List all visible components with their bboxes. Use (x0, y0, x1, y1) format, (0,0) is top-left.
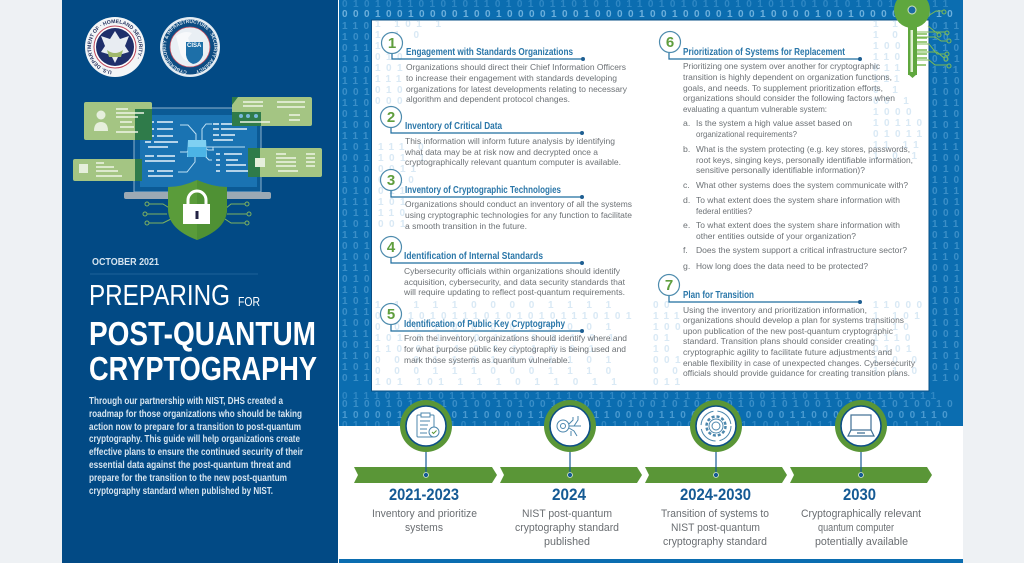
faint binary watermark: 101 (378, 197, 411, 208)
step 6: prioritization of systems for replacement: Prioritizing one system over another for cryptographic (683, 61, 881, 71)
checklist of prioritization factors: What is the system protecting (e.g. key stores, passwords, (696, 144, 910, 154)
checklist of prioritization factors: Is the system a high value asset based on (696, 118, 852, 128)
intro paragraph: cryptography. This guide will help organizations create (89, 434, 300, 445)
binary pattern background: 001 (342, 87, 375, 98)
faint binary watermark (375, 19, 927, 388)
faint binary watermark: 011 0 (378, 186, 430, 197)
faint binary watermark: 101 1 (378, 153, 430, 164)
binary pattern background: 011 (342, 208, 374, 219)
binary pattern background: 011 (932, 186, 964, 197)
logo: CISA seal: CYBERSECURITY & INFRASTRUCTURE · SECURITY AGENCY (162, 20, 218, 74)
faint binary watermark: 0101 (873, 344, 917, 355)
intro paragraph: Through our partnership with NIST, DHS created a (89, 396, 283, 407)
checklist of prioritization factors: g. (683, 261, 690, 271)
timeline (354, 400, 932, 548)
faint binary watermark: 011 (873, 63, 905, 74)
faint binary watermark: 1110 (873, 333, 916, 344)
step 4: identification of internal standards: acquisition, cybersecurity, and data security standards that (404, 277, 626, 287)
faint binary watermark: 00 1 (873, 96, 914, 107)
binary pattern background: 111 (342, 197, 374, 208)
faint binary watermark: 1000 (873, 107, 917, 118)
faint binary watermark: 101 101 1 1 1 0 1 1 0 1 1 (375, 377, 622, 388)
binary pattern background: 001 (932, 263, 965, 274)
step 7: plan for transition: Plan for Transition (683, 290, 754, 301)
intro paragraph: action now to prepare for a transition to post-quantum (89, 422, 301, 433)
binary pattern background: 01110111101110111011110111011101111011101110111101110111 (342, 391, 942, 402)
faint binary watermark: 111 (873, 74, 905, 85)
icon: laptop (848, 415, 874, 436)
icon: circuit key (557, 416, 581, 436)
step 3: inventory of cryptographic technologies (380, 170, 633, 231)
step 1: engagement with standards: Organizations should direct their Chief Information Officers (406, 62, 627, 72)
binary pattern background: 100 (932, 296, 965, 307)
step 2: inventory of critical data: Inventory of Critical Data (405, 121, 502, 132)
binary pattern background: 01001010010100101001010010100101001010010100101001010010 (342, 399, 958, 410)
faint binary watermark: 010 (375, 85, 408, 96)
step 3: inventory of cryptographic technologies: Inventory of Cryptographic Technologies (405, 185, 561, 196)
step 7: plan for transition: upon publication of the new post-quantum cryptographic (683, 326, 894, 336)
faint binary watermark: 01 (653, 333, 675, 344)
milestone: 2024-2030: NIST post-quantum (671, 522, 760, 534)
binary pattern background: 001 (342, 340, 375, 351)
faint binary watermark: 001 (378, 219, 411, 230)
checklist of prioritization factors: sensitive personally identifiable information)? (696, 165, 865, 175)
binary pattern background: 101 (342, 362, 375, 373)
step 6: prioritization of systems for replacement: evaluating a quantum vulnerable system: (683, 104, 827, 114)
data card D (248, 148, 322, 177)
binary pattern background: 111 (342, 329, 374, 340)
faint binary watermark: 0 1 (873, 85, 903, 96)
checklist of prioritization factors: root keys, singing keys, personally identifiable information, (696, 155, 913, 165)
checklist of prioritization factors: federal entities? (696, 206, 752, 216)
binary pattern background: 001 (932, 329, 965, 340)
logo: DHS seal: U.S. DEPARTMENT OF · HOMELAND SECURITY · (87, 19, 143, 74)
milestone: 2021-2023 (354, 400, 497, 534)
binary pattern background (339, 0, 965, 431)
binary pattern background: 100 (342, 120, 375, 131)
step 3: inventory of cryptographic technologies: Organizations should conduct an inventory of all the systems (405, 199, 633, 209)
icon: gear with cycle arrows (701, 411, 731, 441)
milestone: 2024 (500, 400, 642, 548)
step 7: plan for transition: cryptographic agility to facilitate future adjustments and (683, 347, 892, 357)
binary pattern background: 101 (342, 296, 375, 307)
faint binary watermark: 111 0 (378, 142, 429, 153)
checklist of prioritization factors: d. (683, 195, 690, 205)
bottom band (339, 559, 963, 563)
faint binary watermark: 1 10 (873, 322, 914, 333)
faint binary watermark: 0011 (378, 164, 421, 175)
binary pattern background: 111 (932, 65, 964, 76)
binary pattern background: 110 (932, 340, 964, 351)
binary pattern background: 011 (342, 43, 374, 54)
binary pattern background: 110 (342, 21, 374, 32)
faint binary watermark: 0 10 (378, 175, 419, 186)
faint binary watermark: 111 (653, 311, 685, 322)
binary pattern background: 111 (932, 142, 964, 153)
panel: white content card (372, 19, 929, 391)
binary pattern background: 111 (342, 131, 374, 142)
milestone: 2030: Cryptographically relevant (801, 508, 921, 520)
date: OCTOBER 2021 (92, 256, 159, 268)
checklist of prioritization factors: e. (683, 220, 690, 230)
binary pattern background: 101 (932, 318, 965, 329)
step 4: identification of internal standards: 4 (387, 239, 396, 256)
faint binary watermark: 100 (873, 41, 906, 52)
step 4: identification of internal standards: Identification of Internal Standards (404, 251, 543, 262)
milestone: 2030: potentially available (815, 536, 908, 548)
faint binary watermark: 110 (873, 52, 905, 63)
step 3: inventory of cryptographic technologies: a smooth transition in the future. (405, 221, 527, 231)
intro paragraph: effective plans to ensure the continued security of their (89, 447, 303, 458)
step 5: identification of public key cryptography (380, 304, 627, 365)
faint binary watermark: 010 (375, 52, 408, 63)
milestone: 2024-2030: Transition of systems to (661, 508, 769, 520)
faint binary watermark: 110 (378, 208, 410, 219)
step 7: plan for transition: Using the inventory and prioritization information, (683, 305, 867, 315)
step 5: identification of public key cryptography: Identification of Public Key Cryptography (404, 319, 565, 330)
data card C (73, 159, 142, 181)
binary pattern background: 101 (932, 32, 965, 43)
binary pattern background: 010 (932, 76, 965, 87)
step 7: plan for transition: enable flexibility in case of unexpected changes. Cybersecurity (683, 358, 916, 368)
title: PREPARING (89, 280, 230, 312)
intro paragraph: prepare for the transition to the new post-quantum (89, 473, 287, 484)
step 1: engagement with standards (382, 32, 628, 104)
binary pattern background: 110 (342, 351, 374, 362)
step 2: inventory of critical data: 2 (387, 109, 395, 126)
binary pattern background: 101 (932, 351, 965, 362)
binary pattern background: 011 (342, 109, 374, 120)
panel: left cover (62, 0, 338, 563)
binary pattern background: 110 (932, 252, 964, 263)
title: CRYPTOGRAPHY (89, 350, 317, 387)
milestone: 2024: published (544, 536, 590, 548)
binary pattern background: 011 (932, 285, 964, 296)
binary pattern background: 001 (342, 241, 375, 252)
checklist of prioritization factors: To what extent does the system share information with (696, 195, 900, 205)
binary pattern background: 001 (342, 153, 375, 164)
binary pattern background: 100 (342, 32, 375, 43)
checklist of prioritization factors: organizational requirements? (696, 129, 797, 139)
faint binary watermark: 001 (653, 355, 686, 366)
binary pattern background: 010 (932, 362, 965, 373)
faint binary watermark: 1 0 0 (873, 355, 922, 366)
logo: CISA seal: CISA (187, 43, 202, 49)
milestone: 2024-2030 (645, 400, 787, 548)
binary pattern background: 110 (932, 175, 964, 186)
milestone: 2021-2023: 2021-2023 (389, 485, 459, 504)
binary pattern background: 101 (932, 241, 965, 252)
faint binary watermark: 1 1 0 (375, 30, 424, 41)
faint binary watermark: 1 101 1 (375, 19, 446, 30)
binary pattern background: 111 (342, 76, 374, 87)
step 2: inventory of critical data: cryptographically relevant quantum computer is available. (405, 157, 621, 167)
binary pattern background: 00010010000100100001001000010010000100100001001000010010 (342, 9, 958, 20)
binary pattern background: 110 (342, 98, 374, 109)
milestone: 2024: cryptography standard (515, 522, 619, 534)
checklist of prioritization factors: What other systems does the system communicate with? (696, 180, 908, 190)
step 6: prioritization of systems for replacement: Prioritization of Systems for Replacement (683, 47, 846, 58)
binary pattern background: 010 (932, 230, 965, 241)
faint binary watermark: 101 0 1 1 0 1 1 0 1 1 0 1 (375, 333, 619, 344)
checklist of prioritization factors: c. (683, 180, 690, 190)
step 7: plan for transition: standard. Transition plans should consider creating (683, 336, 875, 346)
binary pattern background: 110 (342, 230, 374, 241)
binary pattern background: 011 (342, 307, 374, 318)
step 7: plan for transition (658, 274, 916, 378)
binary pattern background: 110 (932, 373, 964, 384)
step 1: engagement with standards: to increase their engagement with standards developing (406, 73, 617, 83)
checklist of prioritization factors: To what extent does the system share information with (696, 220, 900, 230)
faint binary watermark: 0 0 0 1 1 1 0 0 0 1 1 1 0 (375, 366, 617, 377)
checklist of prioritization factors: How long does the data need to be protected? (696, 261, 868, 271)
binary pattern background: 100 (342, 252, 375, 263)
faint binary watermark: 011 (653, 377, 685, 388)
intro paragraph (89, 396, 303, 497)
icon: shield with padlock (168, 180, 227, 240)
faint binary watermark: 000 (375, 96, 408, 107)
checklist of prioritization factors: a. (683, 118, 690, 128)
binary pattern background: 10000110000110000110000110000110000110000110000110000110 (342, 410, 953, 421)
faint binary watermark: 10110 (873, 118, 927, 129)
step 6: prioritization of systems for replacement: transition is highly dependent on organization functions, (683, 72, 892, 82)
milestone: 2021-2023: Inventory and prioritize (372, 508, 477, 520)
step 1: engagement with standards: Engagement with Standards Organizations (406, 47, 573, 58)
binary pattern background: 010 (342, 274, 375, 285)
step 5: identification of public key cryptography: From the inventory, organizations should identify where and (404, 333, 627, 343)
step 7: plan for transition: 7 (665, 277, 673, 294)
binary pattern background: 001 (932, 131, 965, 142)
step 2: inventory of critical data (380, 106, 621, 167)
step 5: identification of public key cryptography: for what purpose public key cryptography is being used and (404, 344, 626, 354)
step 6: prioritization of systems for replacement: 6 (666, 34, 674, 51)
intro paragraph: essential data against the post-quantum threat and (89, 460, 291, 471)
binary pattern background: 01101110011011100110111001101110011011100110111001101110 (342, 420, 946, 431)
faint binary watermark: 100 (375, 41, 408, 52)
illustration: laptop with data cards and shield (73, 97, 322, 240)
step 2: inventory of critical data: This information will inform future analysis by identifying (405, 136, 615, 146)
binary pattern background: 101 (342, 142, 375, 153)
step 6: prioritization of systems for replacement: organizations should consider the following factors when (683, 93, 895, 103)
step 3: inventory of cryptographic technologies: 3 (387, 172, 395, 189)
binary pattern background: 110 (932, 43, 964, 54)
intro paragraph: roadmap for those organizations who should be taking (89, 409, 302, 420)
step 6: prioritization of systems for replacement: goals, and needs. To supplement prioritization efforts, (683, 83, 883, 93)
step 1: engagement with standards: algorithm and dependent protocol changes. (406, 94, 570, 104)
binary pattern background: 110 (932, 109, 964, 120)
milestone: 2024: NIST post-quantum (522, 508, 612, 520)
milestone: 2030: quantum computer (818, 522, 894, 534)
step 7: plan for transition: organizations should develop a plan for systems transitions (683, 315, 905, 325)
step 1: engagement with standards: organizations for latest developments relating to necessary (406, 84, 628, 94)
binary pattern background: 110 (342, 285, 374, 296)
milestone: 2030 (790, 400, 932, 548)
faint binary watermark: 00 (653, 300, 675, 311)
step 5: identification of public key cryptography: mark those systems as quantum vulnerable. (404, 355, 570, 365)
faint binary watermark: 100 (653, 322, 686, 333)
binary pattern background: 010 (932, 164, 965, 175)
title (89, 280, 317, 387)
binary pattern background: 111 (342, 263, 374, 274)
binary pattern background: 110 (342, 164, 374, 175)
step 2: inventory of critical data: what data may be at risk now and decrypted once a (404, 147, 598, 157)
checklist of prioritization factors: b. (683, 144, 690, 154)
step 1: engagement with standards: 1 (388, 35, 396, 52)
binary pattern background: 100 (342, 318, 375, 329)
binary pattern background: 101 (932, 197, 965, 208)
icon: green key with circuits (894, 0, 951, 78)
binary pattern background: 101 (342, 219, 375, 230)
binary pattern background: 011 (932, 98, 964, 109)
faint binary watermark: 010101011101010101110101 (375, 311, 637, 322)
step 7: plan for transition: officials should provide guidance for creating transition plans. (683, 368, 910, 378)
binary pattern background: 111 (932, 219, 964, 230)
data card B (232, 97, 312, 126)
checklist of prioritization factors (683, 118, 913, 271)
faint binary watermark: 1 0 1 (873, 151, 922, 162)
binary pattern background: 010 (342, 186, 375, 197)
faint binary watermark: 110 0 1 1 0 0 1 1 0 0 1 (375, 344, 600, 355)
faint binary watermark: 101 (375, 63, 408, 74)
binary pattern background: 011 (932, 21, 964, 32)
faint binary watermark: 11000 (873, 300, 927, 311)
faint binary watermark: 11 11 (873, 140, 924, 151)
binary pattern background: 001 (932, 54, 965, 65)
binary pattern background: 100 (932, 87, 965, 98)
faint binary watermark: 1 1 1 1 1 0 0 0 0 1 1 1 1 (375, 300, 617, 311)
binary pattern background: 100 (932, 153, 965, 164)
faint binary watermark: 1 1 (873, 19, 903, 30)
checklist of prioritization factors: other entities outside of your organization? (696, 231, 856, 241)
milestone: 2024: 2024 (552, 485, 586, 504)
binary pattern background: 100 (342, 175, 375, 186)
milestone: 2021-2023: systems (405, 522, 443, 534)
binary pattern background: 101 (342, 54, 375, 65)
milestone: 2030: 2030 (843, 485, 876, 504)
step 4: identification of internal standards (380, 236, 626, 297)
data card A (84, 102, 152, 140)
faint binary watermark: 1 101 (873, 311, 925, 322)
faint binary watermark: 0 0 0 1 0 0 0 0 1 0 0 0 1 (375, 322, 617, 333)
binary pattern background: 011 (342, 373, 374, 384)
icon: clipboard checklist (417, 413, 439, 437)
faint binary watermark: 111 (375, 74, 407, 85)
binary pattern background: 011 (932, 307, 964, 318)
faint binary watermark: 10 (653, 344, 675, 355)
faint binary watermark: 01011 (873, 129, 927, 140)
checklist of prioritization factors: f. (683, 245, 688, 255)
binary pattern background: 101 (932, 274, 965, 285)
faint binary watermark: 1 1 0 (873, 366, 922, 377)
step 5: identification of public key cryptography: 5 (387, 306, 395, 323)
binary pattern background: 000 (932, 208, 965, 219)
faint binary watermark: 0 0 (653, 366, 683, 377)
step 4: identification of internal standards: Cybersecurity officials within organizations should identify (404, 266, 621, 276)
checklist of prioritization factors: Does the system support a critical infrastructure sector? (696, 245, 907, 255)
step 6: prioritization of systems for replacement (660, 32, 913, 271)
binary pattern background: 010 (342, 65, 375, 76)
milestone: 2024-2030: 2024-2030 (680, 485, 751, 504)
milestone: 2024-2030: cryptography standard (663, 536, 767, 548)
title: POST-QUANTUM (89, 315, 316, 352)
circuit traces (143, 202, 251, 225)
binary pattern background: 101 (932, 120, 965, 131)
intro paragraph: cryptography standard when published by NIST. (89, 486, 273, 497)
faint binary watermark: 1 0 (873, 30, 903, 41)
faint binary watermark: 0 0 0 1 1 0 1 0 0 1 1 0 1 (375, 355, 617, 366)
step 4: identification of internal standards: will require updating to reflect post-quantum requirements. (403, 287, 625, 297)
step 3: inventory of cryptographic technologies: using cryptographic technologies for any function to facilitate (405, 210, 632, 220)
title: FOR (238, 294, 260, 309)
